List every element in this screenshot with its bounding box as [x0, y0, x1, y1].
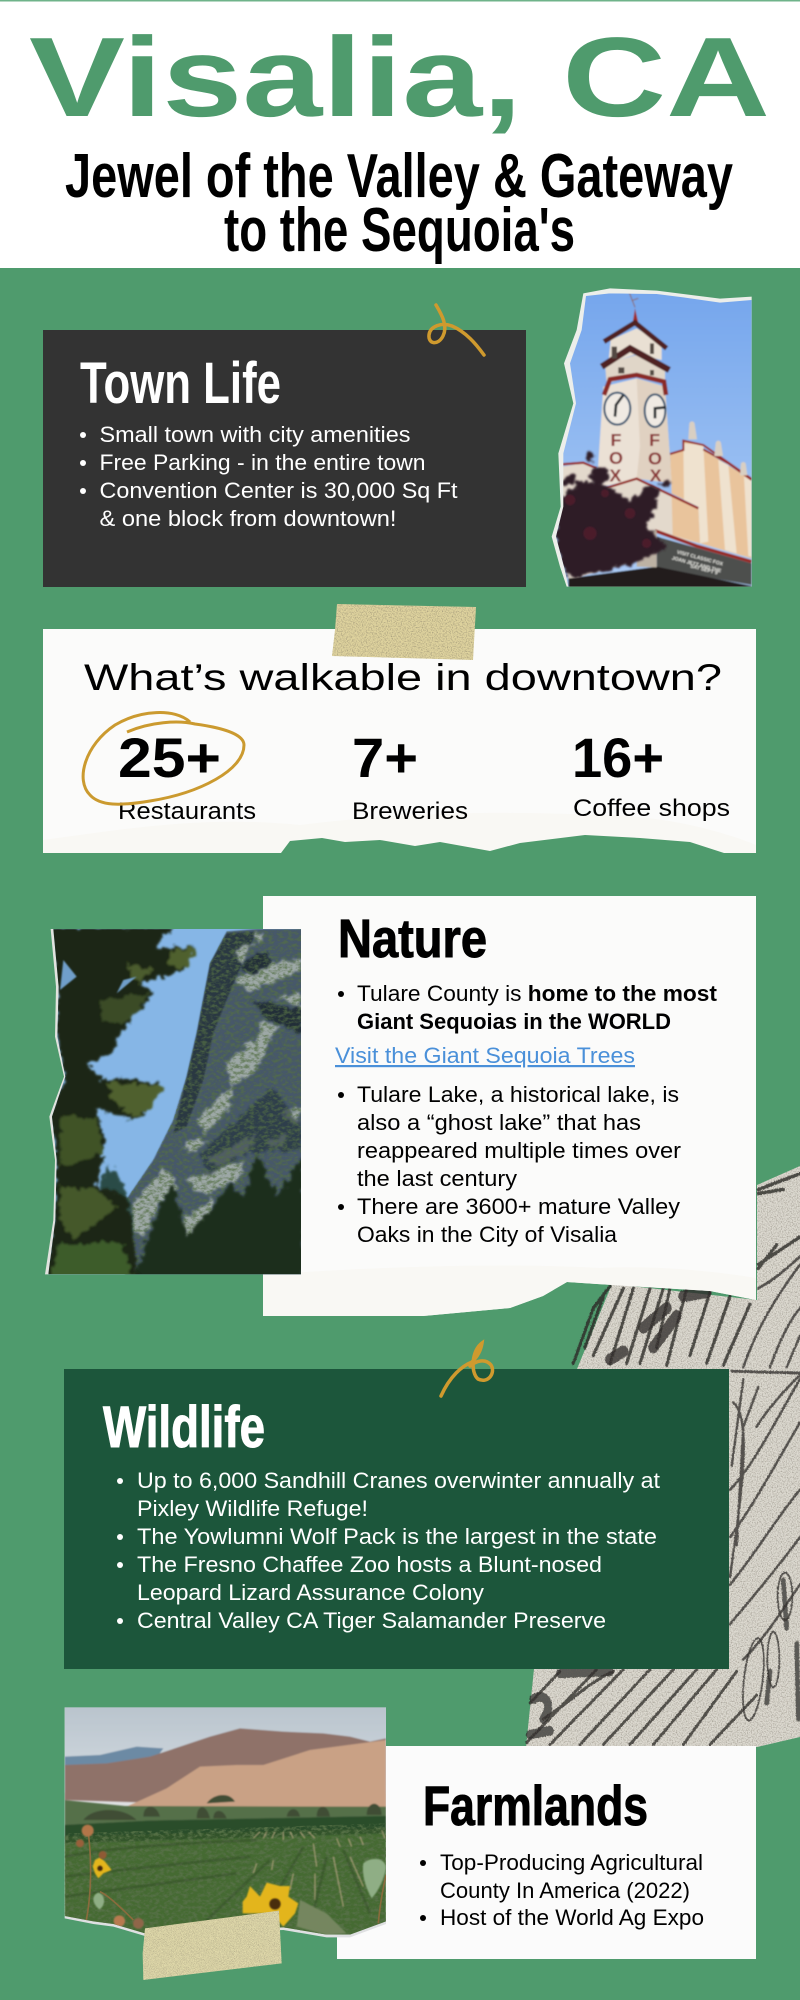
heading: town life: Town Life — [80, 351, 281, 416]
list: wildlife — [117, 1468, 660, 1633]
list: town life: & one block from downtown! — [100, 506, 397, 531]
panel: walkable downtown — [43, 604, 756, 853]
heading: wildlife: Wildlife — [103, 1395, 265, 1460]
link: visit the giant sequoia trees: Visit the Giant Sequoia Trees — [335, 1043, 635, 1068]
sunflowers — [93, 1857, 298, 1927]
list: farmlands: County In America (2022) — [440, 1878, 690, 1903]
tower lettering: X — [650, 466, 662, 486]
list: nature top: Giant Sequoias in the WORLD — [357, 1009, 671, 1034]
stat: restaurants — [118, 726, 256, 825]
list: nature bottom: the last century — [357, 1166, 517, 1191]
background: pencil sketch paper — [526, 1166, 800, 1747]
icon: gold squiggle wildlife — [441, 1343, 493, 1396]
stat: breweries — [352, 726, 468, 825]
panel: wildlife — [64, 1369, 729, 1669]
pine tree — [43, 927, 197, 1280]
stat: restaurants: 25+ — [118, 726, 221, 789]
list: wildlife: Up to 6,000 Sandhill Cranes overwinter annually at — [137, 1468, 660, 1493]
tower lettering: F — [649, 430, 660, 450]
list: town life — [80, 422, 457, 531]
panel: town life — [43, 330, 526, 587]
tower lettering: X — [609, 466, 621, 486]
list: wildlife: The Yowlumni Wolf Pack is the largest in the state — [137, 1524, 657, 1549]
tower lettering — [608, 433, 662, 482]
list: wildlife: Leopard Lizard Assurance Colony — [137, 1580, 484, 1605]
heading: farmlands: Farmlands — [423, 1774, 648, 1837]
list: wildlife: Pixley Wildlife Refuge! — [137, 1496, 368, 1521]
list: town life: Convention Center is 30,000 Sq Ft — [100, 478, 457, 503]
list: wildlife: The Fresno Chaffee Zoo hosts a Blunt-nosed — [137, 1552, 602, 1577]
tree — [555, 453, 668, 578]
icon: gold squiggle town life — [429, 305, 484, 355]
photo: fox theatre clock tower — [550, 287, 757, 590]
panel: farmlands — [337, 1746, 756, 1959]
tape: top — [332, 604, 476, 660]
list: farmlands: Top-Producing Agricultural — [440, 1850, 703, 1875]
tower lettering: O — [648, 448, 662, 468]
stat: breweries: 7+ — [352, 726, 418, 789]
list: farmlands — [420, 1850, 704, 1930]
foreground firs — [97, 1153, 303, 1280]
list: nature top: Tulare County is home to the most — [357, 981, 718, 1006]
panel: nature — [263, 896, 756, 1316]
list: wildlife: Central Valley CA Tiger Salamander Preserve — [137, 1608, 606, 1633]
list: town life: Small town with city amenities — [100, 422, 410, 447]
stat: coffee shops: 16+ — [572, 726, 664, 789]
list: nature bottom: also a “ghost lake” that has — [357, 1110, 641, 1135]
flower stems — [86, 1833, 386, 1923]
photo: fox theatre clock tower: SAT SEPT 9 — [689, 563, 718, 577]
title: Visalia, CA — [29, 14, 770, 140]
list: nature bottom: There are 3600+ mature Valley — [357, 1194, 680, 1219]
subtitle — [65, 142, 733, 265]
list: town life: Free Parking - in the entire town — [100, 450, 426, 475]
tower lettering: F — [610, 430, 621, 450]
list: nature top — [338, 981, 718, 1034]
stat: coffee shops — [572, 726, 730, 822]
heading: walkable: What’s walkable in downtown? — [84, 657, 722, 698]
list: nature bottom: reappeared multiple times over — [357, 1138, 681, 1163]
stat: breweries: Breweries — [352, 798, 468, 825]
header band — [0, 0, 800, 268]
icon: gold hand-drawn circle — [83, 713, 244, 804]
list: nature bottom: Tulare Lake, a historical lake, is — [357, 1082, 679, 1107]
heading: nature: Nature — [338, 909, 487, 969]
photo: fox theatre clock tower: VISIT CLASSIC FOX — [676, 549, 724, 568]
stat: restaurants: Restaurants — [118, 798, 256, 825]
photo: fox theatre clock tower: JOAN JETT AND THE — [671, 555, 722, 575]
photo: granite cliff and pines — [43, 927, 303, 1280]
photo: orchard and mountains — [63, 1706, 387, 1940]
list: farmlands: Host of the World Ag Expo — [440, 1905, 704, 1930]
tape: bottom — [143, 1911, 282, 1980]
subtitle: to the Sequoia's — [224, 196, 575, 265]
tower lettering: O — [609, 448, 623, 468]
stat: coffee shops: Coffee shops — [573, 795, 730, 822]
list: nature bottom: Oaks in the City of Visalia — [357, 1222, 618, 1247]
list: nature bottom — [338, 1082, 681, 1247]
